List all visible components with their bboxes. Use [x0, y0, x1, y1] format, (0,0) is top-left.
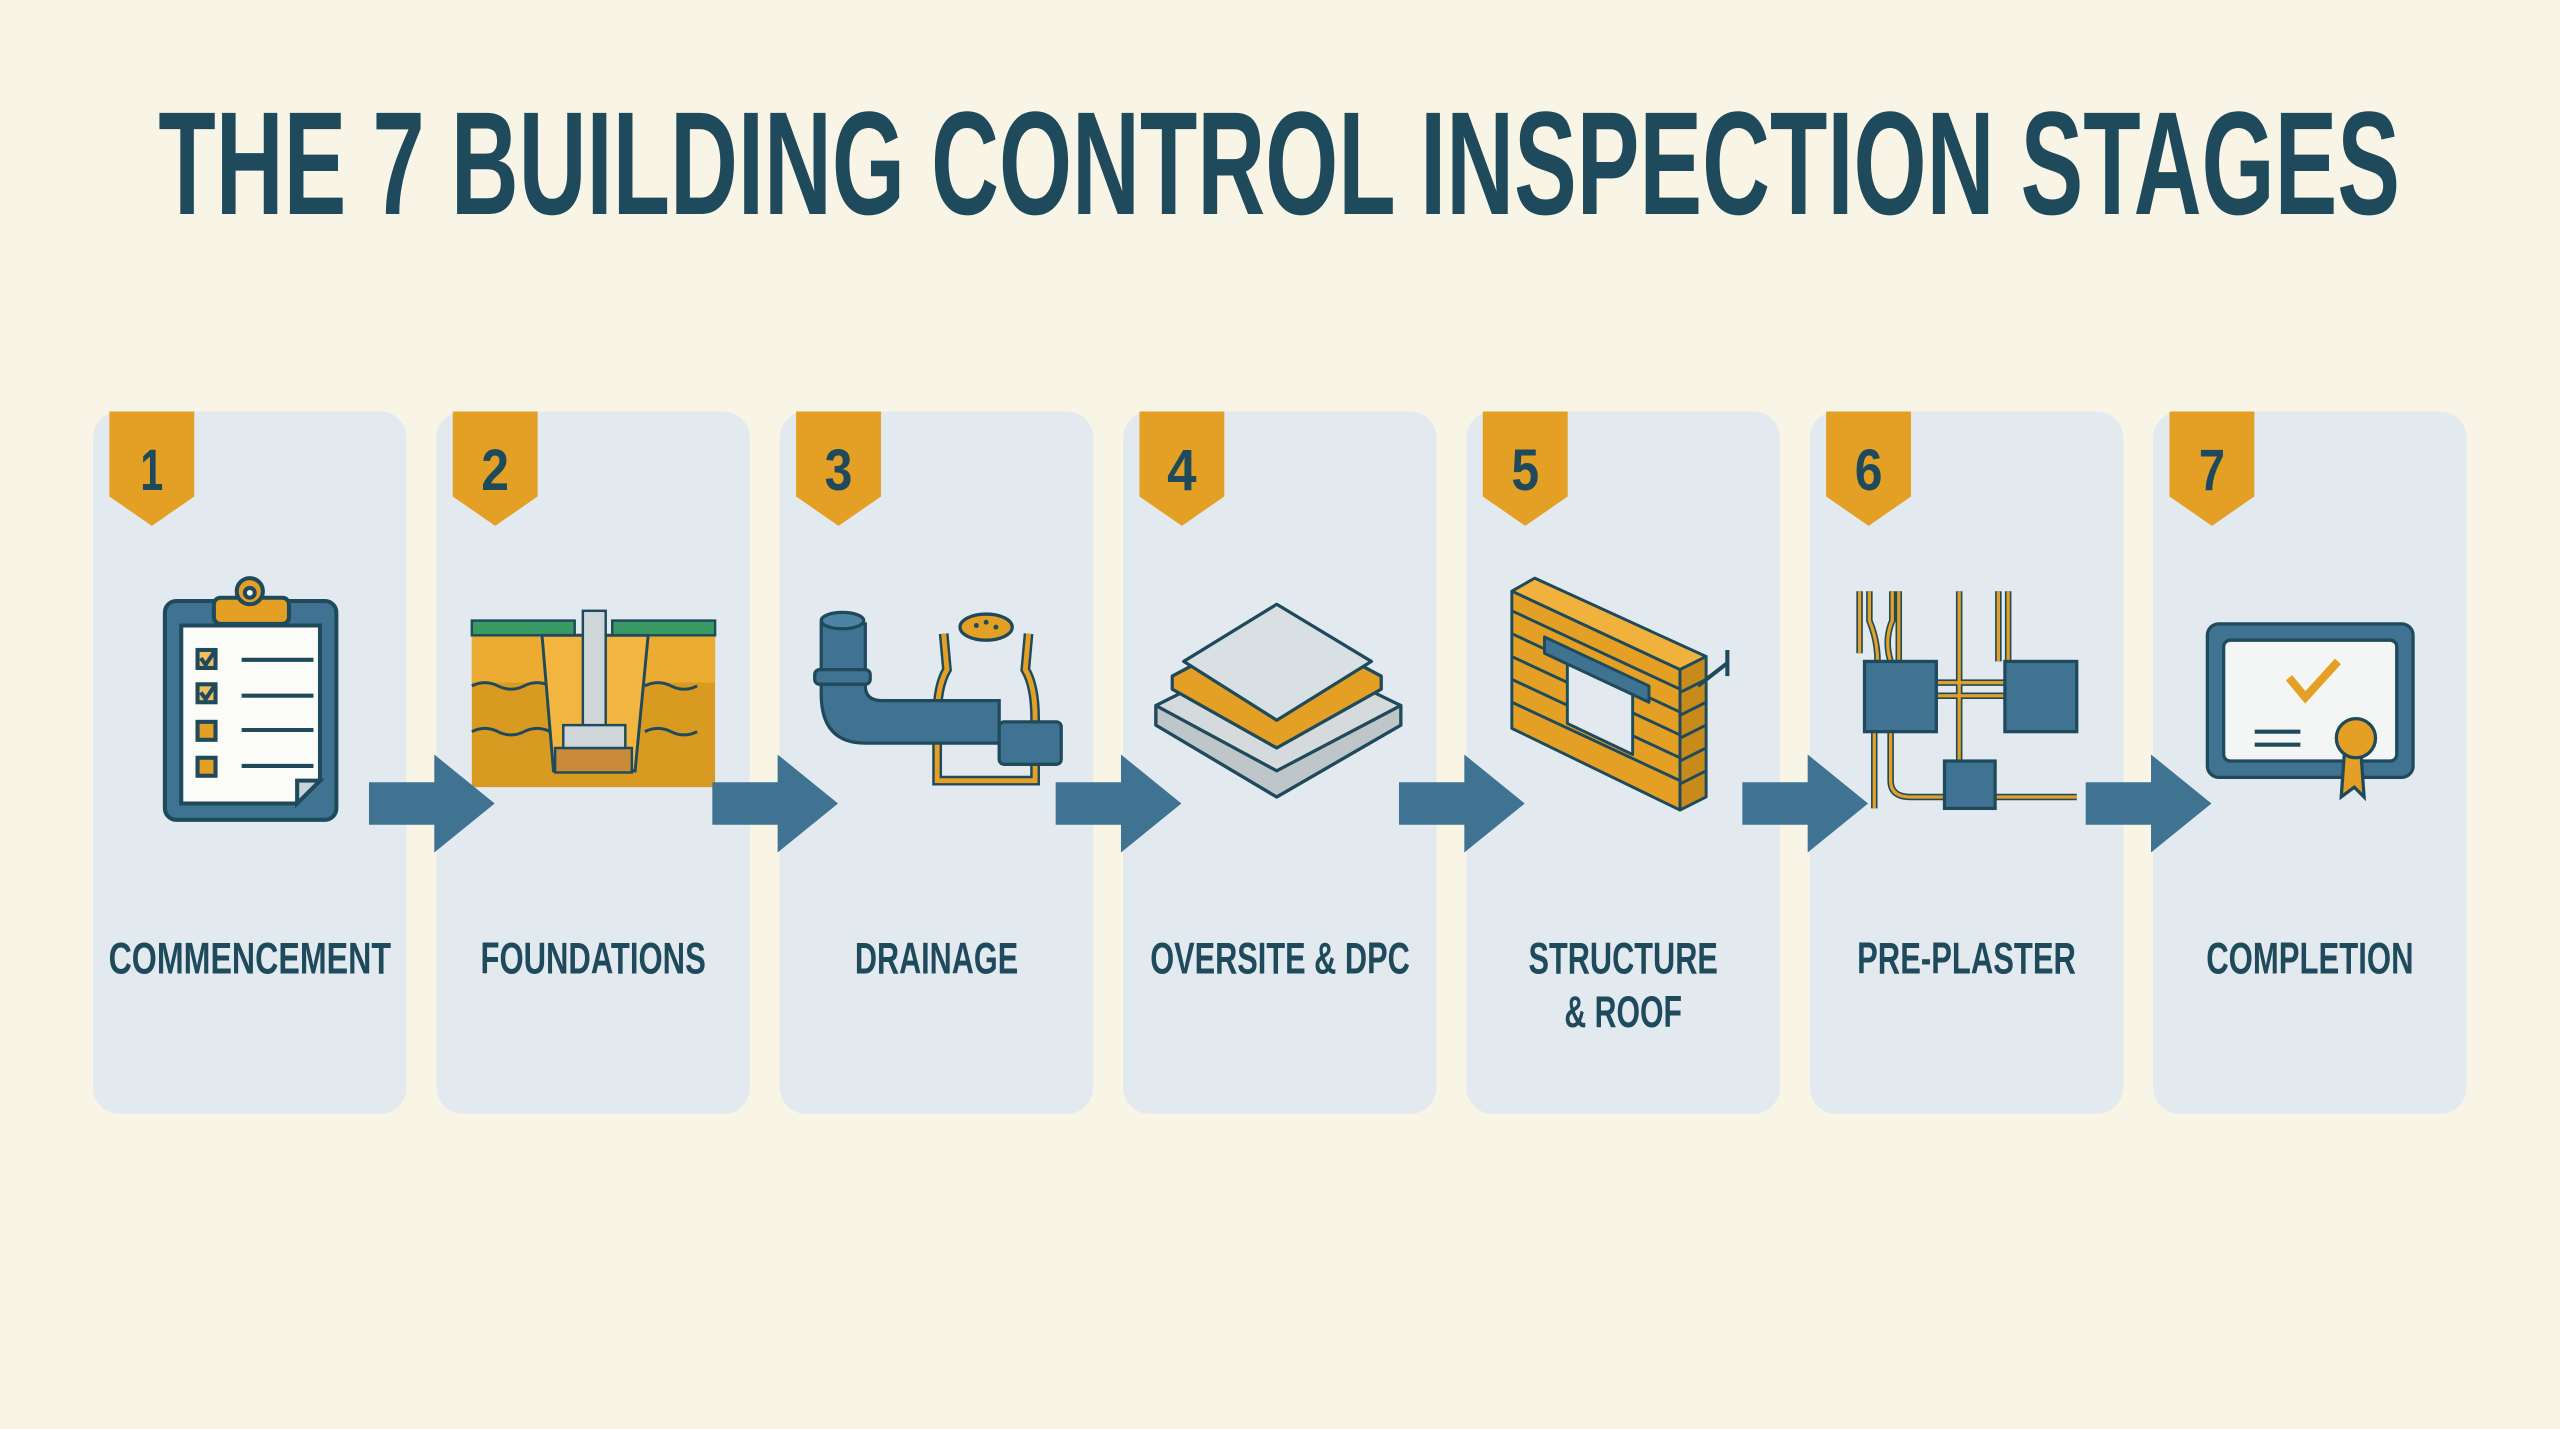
- badge 3: 3: [825, 438, 852, 503]
- arrow 3 to 4: [1056, 755, 1181, 853]
- panel: stage 1 commencement: [93, 412, 407, 1114]
- badge 2: 2: [481, 438, 509, 503]
- label: pre-plaster: PRE-PLASTER: [1857, 934, 2076, 983]
- label: foundations: FOUNDATIONS: [480, 934, 706, 983]
- label: structure & roof: & ROOF: [1564, 988, 1682, 1037]
- panel: stage 4 oversite & dpc: [1123, 412, 1437, 1114]
- panel: stage 7 completion: [2153, 412, 2467, 1114]
- badge 5: 5: [1511, 438, 1539, 503]
- arrow 2 to 3: [712, 755, 838, 853]
- panel: stage 5 structure & roof: [1466, 412, 1780, 1114]
- icon: brick wall: [1512, 578, 1727, 810]
- badge 4: 4: [1167, 438, 1197, 503]
- badge 7: 7: [2199, 438, 2225, 503]
- label: commencement: COMMENCEMENT: [109, 934, 391, 983]
- badge 5: [1483, 412, 1568, 526]
- label: completion: COMPLETION: [2206, 934, 2414, 983]
- badge 1: [109, 412, 194, 526]
- panel: stage 3 drainage: [780, 412, 1093, 1114]
- icon: foundation trench: [472, 611, 715, 787]
- arrow 6 to 7: [2086, 755, 2211, 853]
- arrow 1 to 2: [369, 755, 495, 853]
- badge 1: 1: [140, 438, 163, 503]
- icon: clipboard: [165, 578, 336, 820]
- panel: stage 6 pre-plaster: [1810, 412, 2123, 1114]
- badge 3: [796, 412, 881, 526]
- badge 2: [453, 412, 538, 526]
- label: structure & roof: STRUCTURE: [1528, 934, 1718, 983]
- icon: electrical wiring: [1860, 591, 2077, 808]
- badge 6: [1826, 412, 1911, 526]
- icon: certificate: [2207, 624, 2413, 797]
- panel: stage 2 foundations: [436, 412, 750, 1114]
- arrow 5 to 6: [1742, 755, 1868, 853]
- badge 6: 6: [1855, 438, 1882, 503]
- label: oversite & dpc: OVERSITE & DPC: [1150, 934, 1410, 983]
- label: structure & roof: [1528, 934, 1718, 1037]
- label: drainage: DRAINAGE: [855, 934, 1018, 983]
- icon: drainage pipes: [815, 612, 1061, 781]
- badge 7: [2169, 412, 2254, 526]
- icon: slab layers: [1156, 604, 1401, 797]
- arrow 4 to 5: [1399, 755, 1525, 853]
- badge 4: [1139, 412, 1224, 526]
